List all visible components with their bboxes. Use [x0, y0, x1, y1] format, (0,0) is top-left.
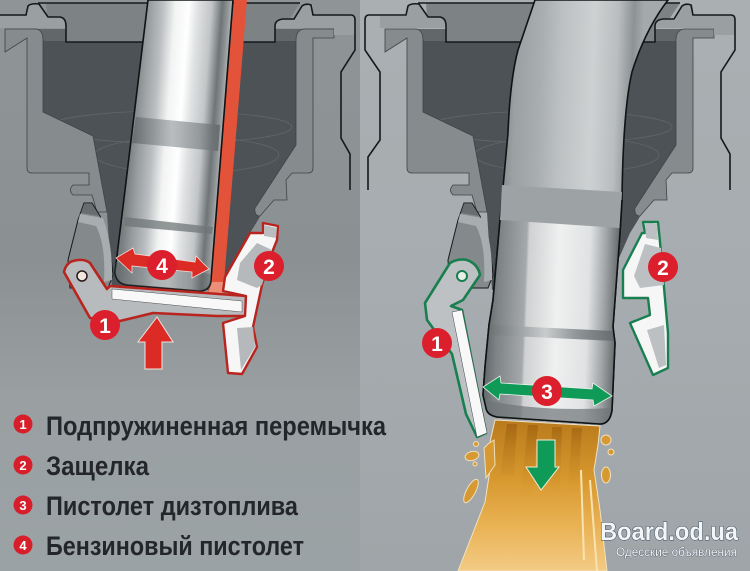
- dimension arrow 4: [116, 248, 209, 278]
- spring-loaded jumper: [64, 260, 246, 321]
- badge 4: 4: [156, 255, 168, 278]
- left diagram: petrol nozzle held by latch: [0, 0, 355, 374]
- filler neck housing: [0, 3, 355, 290]
- badge 4: [147, 250, 177, 280]
- badge 2: [648, 252, 678, 282]
- badge 1: 1: [431, 333, 443, 356]
- watermark: Одесские объявления: [616, 547, 737, 559]
- watermark: Board.od.ua: [600, 518, 739, 546]
- legend item 4: 4: [19, 538, 27, 553]
- legend item 4: Бензиновый пистолет: [46, 531, 304, 561]
- down arrow: [526, 440, 559, 490]
- legend item 2: 2: [19, 458, 27, 473]
- badge 3: [532, 376, 562, 406]
- legend item 3: 3: [19, 498, 27, 513]
- outer wall outline between panels: [365, 15, 380, 190]
- badge 2: [254, 251, 284, 281]
- diesel nozzle: [483, 0, 668, 424]
- right diagram: diesel nozzle: [365, 0, 735, 571]
- filler neck housing: [380, 3, 735, 290]
- fuel stream: [458, 420, 614, 571]
- red petrol channel: [206, 0, 247, 300]
- up arrow: [138, 317, 173, 369]
- badge 2: 2: [263, 256, 275, 279]
- badge 1: [422, 328, 452, 358]
- legend item 1: Подпружиненная перемычка: [46, 411, 387, 441]
- latch: [623, 222, 668, 375]
- watermark: [600, 518, 739, 559]
- latch: [223, 223, 278, 374]
- badge 1: 1: [99, 315, 111, 338]
- badge 3: 3: [541, 381, 553, 404]
- spring-loaded jumper: [425, 259, 487, 437]
- badge 2: 2: [657, 257, 669, 280]
- legend: [14, 411, 387, 561]
- petrol nozzle: [115, 0, 233, 291]
- legend item 2: Защелка: [46, 451, 150, 481]
- legend item 1: 1: [19, 417, 27, 432]
- badge 1: [90, 310, 120, 340]
- dimension arrow 3: [483, 376, 612, 406]
- legend item 3: Пистолет дизтоплива: [46, 491, 299, 521]
